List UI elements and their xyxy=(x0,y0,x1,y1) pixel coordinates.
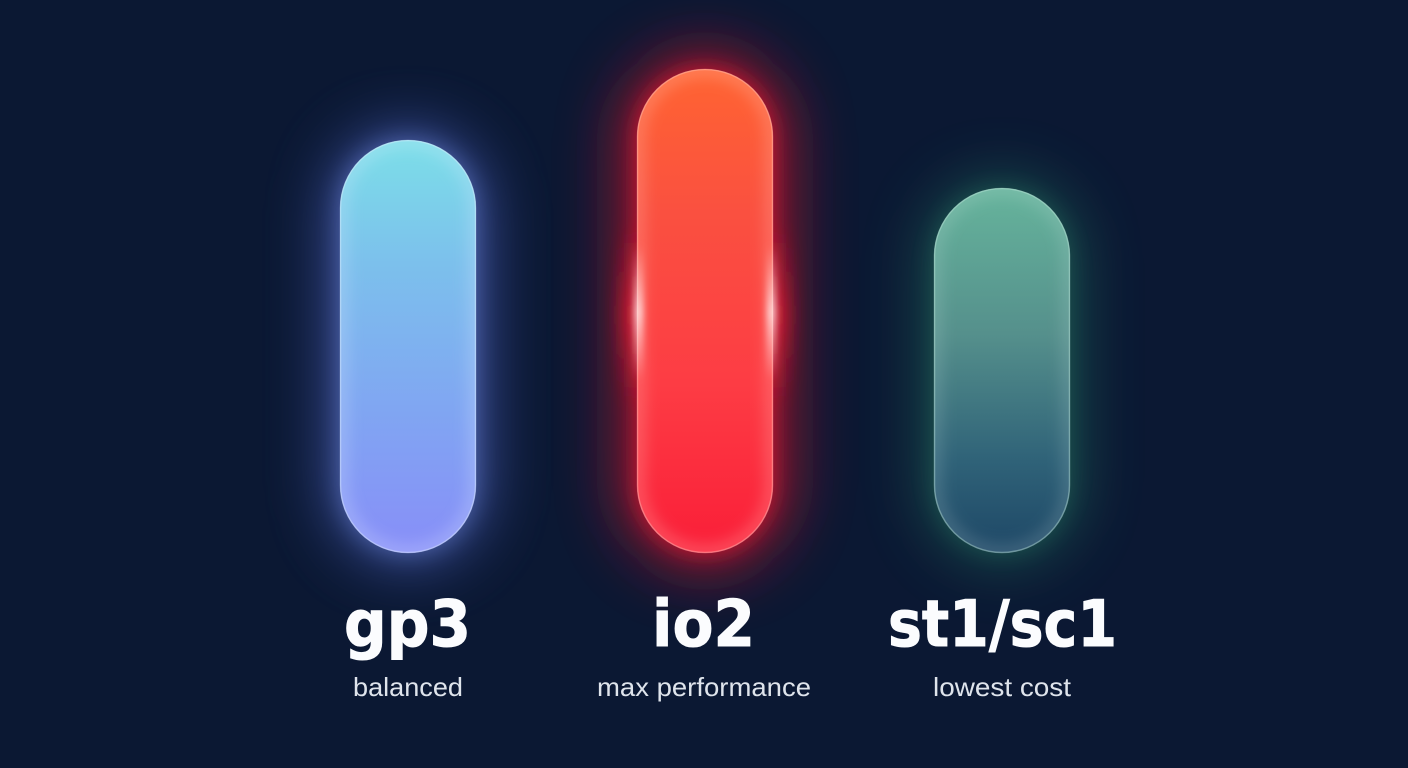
caption: lowest cost: lowest cost xyxy=(933,672,1072,702)
caption: max performance: max performance xyxy=(597,672,811,702)
caption: balanced: balanced xyxy=(353,672,463,702)
pill: st1/sc1 xyxy=(922,176,1082,565)
flare: right edge xyxy=(768,245,775,380)
label: gp3: gp3 xyxy=(344,588,471,662)
pill: io2 xyxy=(617,49,793,573)
pill: gp3 xyxy=(328,128,488,565)
label: st1/sc1: st1/sc1 xyxy=(888,588,1117,662)
label: io2: io2 xyxy=(652,588,755,662)
flare: left edge xyxy=(635,245,642,380)
infographic canvas xyxy=(289,10,1114,702)
